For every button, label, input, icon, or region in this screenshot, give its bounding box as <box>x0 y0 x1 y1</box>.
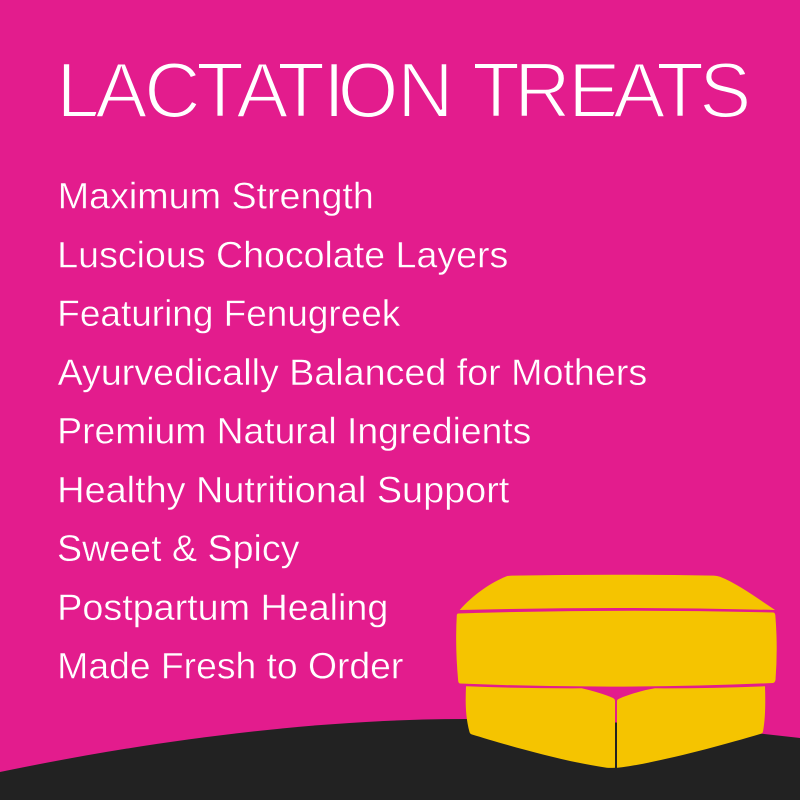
box base right <box>617 686 765 768</box>
feature list <box>57 174 647 686</box>
feature: Luscious Chocolate Layers: Luscious Chocolate Layers <box>57 233 508 275</box>
feature: Premium Natural Ingredients: Premium Natural Ingredients <box>57 410 531 452</box>
feature: Healthy Nutritional Support: Healthy Nutritional Support <box>57 468 510 510</box>
title: LACTATION TREATS <box>56 46 751 134</box>
dark curved ground <box>0 719 800 800</box>
feature: Postpartum Healing: Postpartum Healing <box>57 586 388 628</box>
box base left <box>466 686 615 768</box>
feature: Featuring Fenugreek: Featuring Fenugreek <box>57 292 401 334</box>
feature: Made Fresh to Order: Made Fresh to Order <box>57 644 403 686</box>
box lid front <box>456 611 777 687</box>
feature: Sweet & Spicy: Sweet & Spicy <box>57 527 300 569</box>
feature: Ayurvedically Balanced for Mothers: Ayurvedically Balanced for Mothers <box>58 351 647 393</box>
icon: yellow treat box <box>456 575 777 768</box>
feature: Maximum Strength: Maximum Strength <box>58 174 374 216</box>
box lid top <box>460 575 775 610</box>
